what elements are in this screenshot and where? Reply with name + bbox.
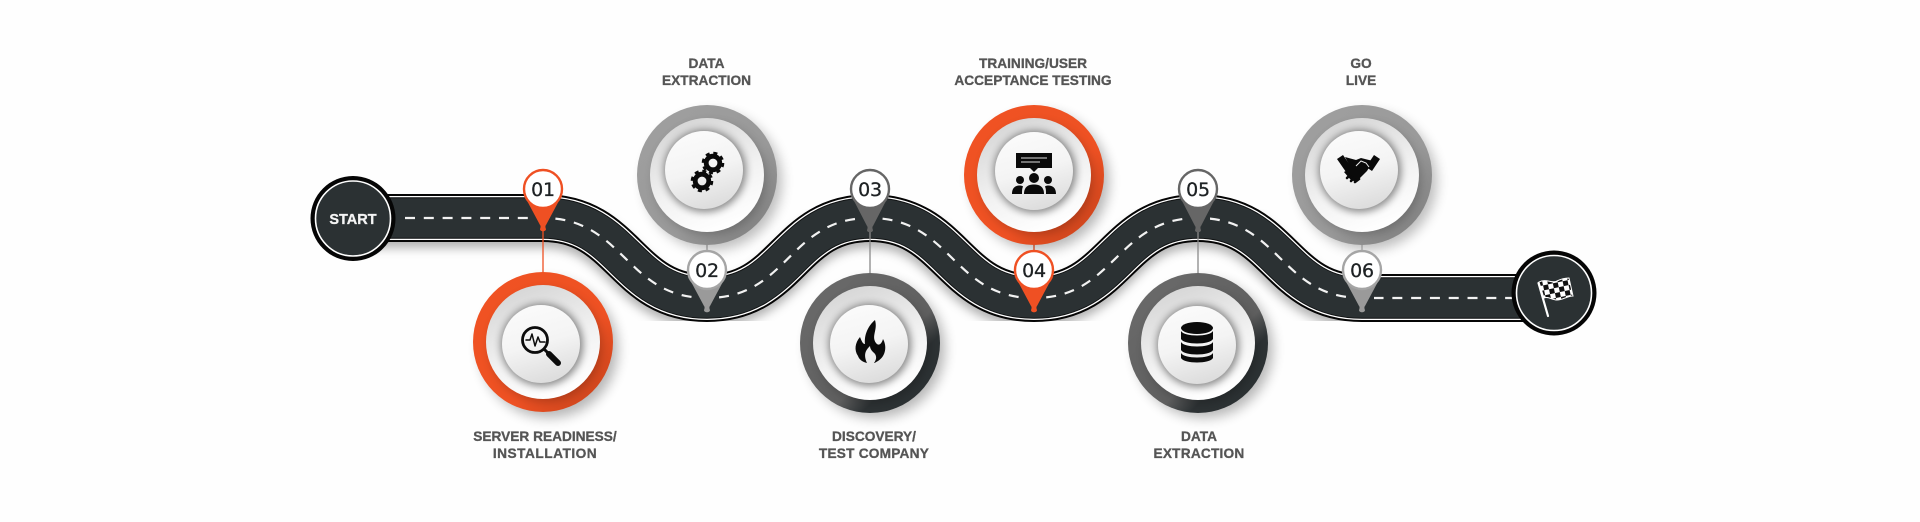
icon: gears: [692, 153, 723, 191]
label: discovery / test company: DISCOVERY/: [832, 429, 916, 444]
step 01 ring: server readiness: [473, 272, 618, 418]
label: data extraction (bottom): EXTRACTION: [1154, 446, 1244, 461]
icon: database: [1181, 322, 1213, 362]
start marker: [310, 176, 396, 261]
pin 03: 03: [858, 179, 882, 201]
label: training / user acceptance testing: TRAINING/USER: [979, 56, 1087, 71]
step 04 ring: training: [964, 105, 1109, 250]
icon: handshake: [1337, 155, 1380, 182]
pin 05: 05: [1186, 179, 1210, 201]
label: training / user acceptance testing: ACCEPTANCE TESTING: [954, 73, 1112, 88]
label: data extraction (top): DATA: [689, 56, 725, 71]
pin 02: 02: [695, 260, 719, 282]
icon: group with speech bubble: [1012, 153, 1056, 194]
label: discovery / test company: TEST COMPANY: [819, 446, 929, 461]
pin 03: [851, 170, 889, 232]
step 06 ring: go live: [1292, 105, 1437, 250]
pin 05: [1179, 170, 1217, 232]
step 03 ring: discovery: [800, 273, 945, 418]
label: data extraction (top): EXTRACTION: [662, 73, 751, 88]
label: go live: LIVE: [1346, 73, 1376, 88]
pin 02: [688, 251, 726, 312]
pin 04: 04: [1022, 260, 1046, 282]
pin 06: 06: [1350, 260, 1374, 282]
icon: magnifier with pulse: [522, 328, 558, 363]
pin 06: [1343, 251, 1381, 312]
icon: flame: [856, 320, 885, 363]
step 02 ring: data extraction: [637, 105, 782, 250]
pin 01: 01: [531, 179, 555, 201]
start marker: START: [329, 212, 377, 228]
pin 01: [524, 170, 562, 231]
finish marker with checkered flag: [1512, 250, 1596, 336]
label: server readiness / installation: INSTALLATION: [493, 446, 597, 461]
label: go live: GO: [1350, 56, 1372, 71]
pin 04: [1015, 251, 1053, 312]
label: server readiness / installation: SERVER READINESS/: [473, 429, 617, 444]
step 05 ring: data extraction: [1128, 273, 1273, 418]
label: data extraction (bottom): DATA: [1181, 429, 1217, 444]
connector lines: [543, 230, 1362, 274]
road: [353, 214, 1554, 305]
